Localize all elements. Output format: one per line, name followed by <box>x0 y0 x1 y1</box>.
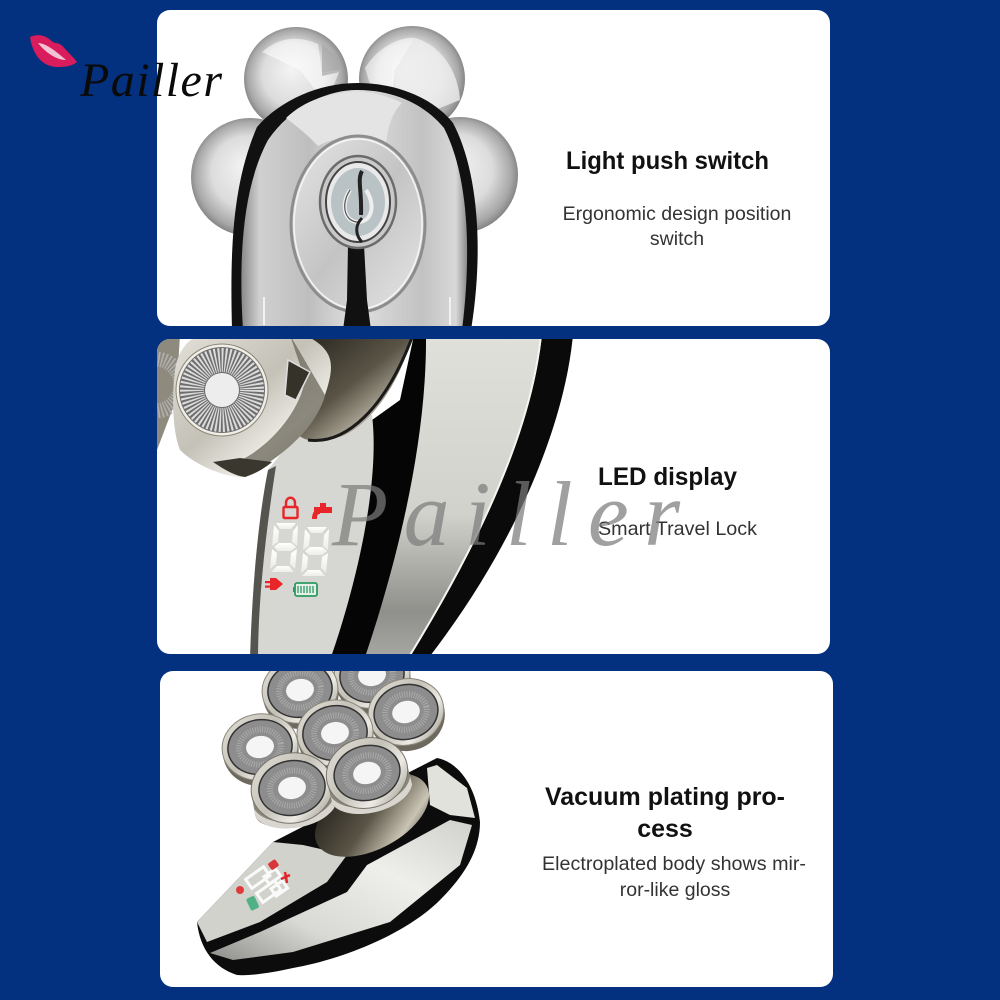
panel: light push switch <box>157 10 830 330</box>
description: light push switch: Ergonomic design position <box>563 203 791 225</box>
side slits <box>264 297 450 325</box>
body shoulder <box>427 765 475 818</box>
panel: LED display <box>129 335 830 660</box>
power button <box>320 156 396 248</box>
foil ring <box>176 344 268 436</box>
description: light push switch: switch <box>650 228 704 250</box>
watermark: Pailler <box>331 463 681 565</box>
heading: LED display: LED display <box>598 463 737 491</box>
right cutter ball <box>448 117 518 230</box>
black stem <box>344 248 370 326</box>
product: shaver front view with display <box>129 335 573 660</box>
cutter head chrome <box>173 335 331 477</box>
description: vacuum plating process: Electroplated body shows mir- <box>542 853 806 875</box>
heading: light push switch: Light push switch <box>566 147 769 175</box>
icon: lips <box>30 35 77 67</box>
body upper silver <box>197 842 347 942</box>
LED digits <box>270 523 329 576</box>
plug icon <box>265 578 283 590</box>
heading: vacuum plating process: Vacuum plating pro- <box>545 783 785 811</box>
battery icon <box>293 583 317 596</box>
cutter heads <box>222 671 445 829</box>
body outline <box>231 83 478 330</box>
product: shaver rear view with power button <box>191 26 518 330</box>
LED digits <box>246 867 288 902</box>
silver band <box>362 335 542 660</box>
description: vacuum plating process: ror-like gloss <box>620 879 731 901</box>
top left cutter ball <box>244 27 348 120</box>
chrome latch <box>285 360 310 400</box>
logo: Pailler <box>30 35 222 107</box>
second cutter head <box>157 339 180 450</box>
tap icon <box>312 503 332 519</box>
heading: vacuum plating process: cess <box>637 815 693 843</box>
black stripe <box>328 335 426 660</box>
body silver <box>241 90 467 330</box>
description: LED display: Smart Travel Lock <box>598 518 757 540</box>
left cutter ball <box>191 118 264 234</box>
body outer black <box>197 758 480 975</box>
product: shaver three-quarter view <box>197 671 480 976</box>
head mount <box>315 774 429 857</box>
display icons <box>236 859 290 911</box>
front silver face <box>250 415 374 660</box>
lock icon <box>284 498 298 518</box>
logo wordmark: Pailler <box>79 54 222 107</box>
panel: vacuum plating process <box>160 636 833 987</box>
top right cutter ball <box>359 26 465 118</box>
body lower silver <box>210 820 472 960</box>
oval recess <box>291 136 425 312</box>
outer black edge <box>405 335 573 660</box>
head base <box>300 339 410 440</box>
